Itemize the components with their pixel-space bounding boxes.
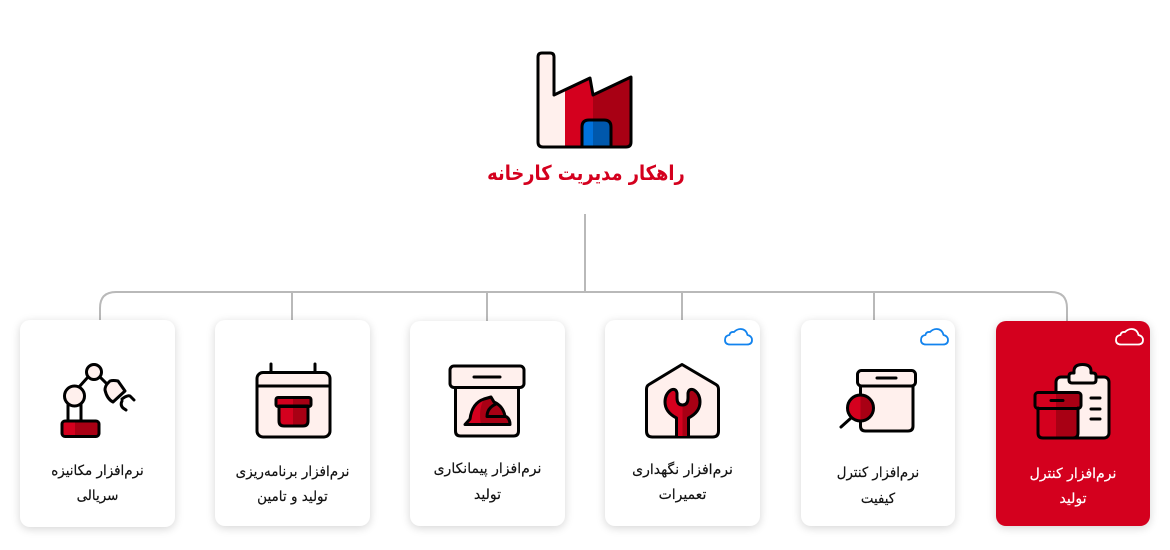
panel: production control software (highlighted) <box>996 321 1150 526</box>
label: نرم‌افزار مکانیزه <box>51 462 144 478</box>
icon: box with magnifier <box>839 369 917 432</box>
label: نرم‌افزار کنترل <box>1030 466 1116 482</box>
icon: cloud <box>1115 328 1144 346</box>
label: سریالی <box>77 488 118 504</box>
icon: calendar with box <box>256 362 332 438</box>
panel: maintenance software <box>605 320 760 526</box>
label: کیفیت <box>861 490 895 506</box>
label <box>1030 466 1116 507</box>
icon: robot arm <box>60 363 136 438</box>
label <box>236 464 349 505</box>
connector tree <box>99 214 1068 321</box>
label <box>632 461 733 503</box>
icon: house with wrench <box>645 363 720 438</box>
icon: factory <box>536 52 632 148</box>
label: تولید <box>1060 491 1086 507</box>
label <box>434 461 541 503</box>
title: راهکار مدیریت کارخانه <box>487 161 685 185</box>
label <box>837 465 919 506</box>
panel: serial mechanization software <box>20 320 175 527</box>
panel: quality control software <box>801 320 955 526</box>
label: نرم‌افزار کنترل <box>837 465 919 481</box>
label: تعمیرات <box>659 487 706 503</box>
label: نرم‌افزار برنامه‌ریزی <box>236 464 349 480</box>
icon: cloud <box>920 328 949 346</box>
label: تولید <box>474 486 501 502</box>
icon: cloud <box>724 328 753 346</box>
label: نرم‌افزار پیمانکاری <box>434 461 541 477</box>
label <box>51 462 144 504</box>
icon: box with hard hat <box>448 364 526 438</box>
label: تولید و تامین <box>257 489 328 505</box>
panel: production planning and supply software <box>215 320 370 526</box>
icon: clipboard with box <box>1034 363 1110 440</box>
panel: production contracting software <box>410 321 565 526</box>
label: نرم‌افزار نگهداری <box>632 462 733 478</box>
